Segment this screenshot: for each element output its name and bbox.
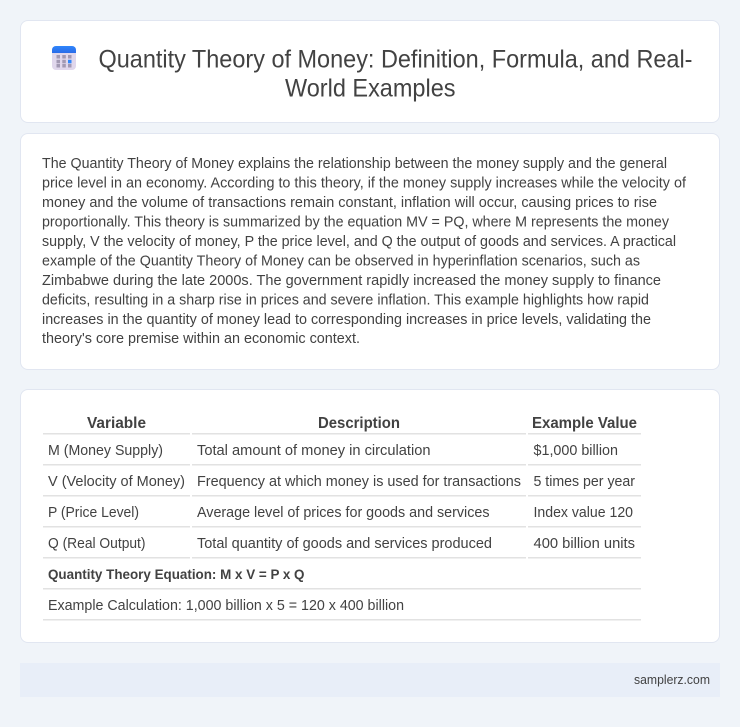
text block: description paragraph: example of the Quantity Theory of Money can be observed in hyperinflation scenarios, such as bbox=[42, 253, 640, 269]
table row: equation: Quantity Theory Equation: M x V = P x Q bbox=[48, 567, 304, 583]
table row: price level bbox=[48, 505, 633, 521]
table header row: Variable bbox=[87, 415, 146, 432]
footer source text: samplerz.com bbox=[634, 672, 710, 687]
table row: velocity of money: V (Velocity of Money) bbox=[48, 474, 185, 490]
table row: price level: P (Price Level) bbox=[48, 505, 139, 521]
table row: price level: Index value 120 bbox=[534, 505, 633, 521]
text block: description paragraph: deficits, resulting in a sharp rise in prices and severe inflation. This example highlights how rapid bbox=[42, 292, 649, 308]
text block: description paragraph: supply, V the velocity of money, P the price level, and Q the output of goods and services. A practical bbox=[42, 234, 676, 250]
table row: money supply: Total amount of money in circulation bbox=[197, 443, 430, 459]
table row: money supply: $1,000 billion bbox=[534, 443, 618, 459]
icon: calendar bbox=[52, 46, 76, 70]
table row: real output: Total quantity of goods and services produced bbox=[197, 536, 492, 552]
table header row: Example Value bbox=[532, 415, 637, 432]
text block: description paragraph: proportionally. This theory is summarized by the equation MV = PQ, where M represents the money bbox=[42, 214, 670, 230]
table row: money supply: M (Money Supply) bbox=[48, 443, 163, 459]
table row: money supply bbox=[48, 443, 618, 459]
table row: real output bbox=[48, 536, 635, 552]
text block: description paragraph: money and the volume of transactions remain constant, inflation will occur, causing prices to rise bbox=[42, 195, 657, 211]
text block: description paragraph: price level in an economy. According to this theory, if the money supply increases while the velocity of bbox=[42, 176, 687, 192]
text block: description paragraph: theory's core premise within an economic context. bbox=[42, 331, 360, 347]
text block: description paragraph: Zimbabwe during the late 2000s. The government rapidly increased the money supply to finance bbox=[42, 273, 661, 289]
table row: price level: Average level of prices for goods and services bbox=[197, 505, 490, 521]
panel: description card bbox=[20, 133, 720, 370]
panel: table card bbox=[20, 389, 720, 643]
title: Quantity Theory of Money: Definition, Formula, and Real- bbox=[98, 46, 692, 74]
title: World Examples bbox=[285, 74, 456, 102]
text block: description paragraph: The Quantity Theory of Money explains the relationship between the money supply and the general bbox=[42, 156, 667, 172]
table header row: Description bbox=[318, 415, 400, 432]
table row: velocity of money: 5 times per year bbox=[534, 474, 635, 490]
table row: real output: Q (Real Output) bbox=[48, 536, 146, 552]
table bbox=[43, 415, 641, 620]
table header row bbox=[87, 415, 637, 432]
text block: description paragraph: increases in the quantity of money lead to corresponding increases in price levels, validating the bbox=[42, 312, 651, 328]
table row: velocity of money: Frequency at which money is used for transactions bbox=[197, 474, 521, 490]
panel: title card bbox=[20, 20, 720, 123]
table row: velocity of money bbox=[48, 474, 635, 490]
footer bar bbox=[20, 663, 720, 697]
table row: example calculation: Example Calculation: 1,000 billion x 5 = 120 x 400 billion bbox=[48, 598, 404, 614]
text block: description paragraph bbox=[42, 156, 687, 347]
table row: real output: 400 billion units bbox=[534, 536, 635, 552]
title bbox=[98, 46, 692, 102]
